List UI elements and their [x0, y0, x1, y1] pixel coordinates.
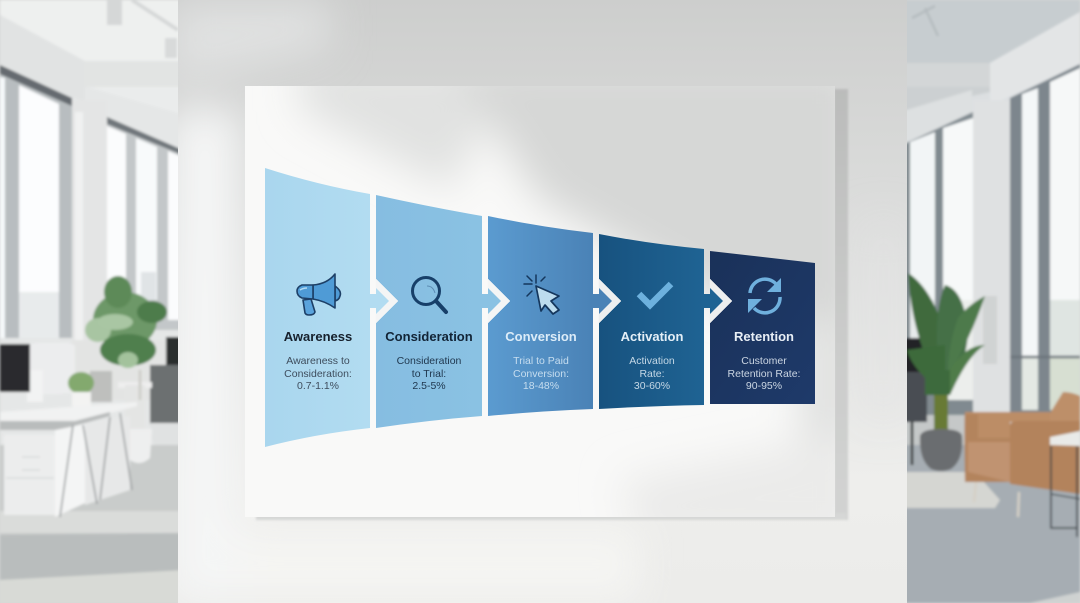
- wall sunlight: [178, 0, 611, 590]
- metric: Activation Rate: Activation: [629, 355, 675, 367]
- icon: magnifier: [412, 278, 446, 312]
- desk chair: [88, 371, 112, 402]
- desk: [0, 402, 137, 422]
- metric: Consideration to Trial: to Trial:: [412, 368, 446, 380]
- board lighting: [296, 86, 835, 517]
- white monitor back: [28, 342, 75, 394]
- title: Activation: Activation: [621, 329, 683, 344]
- metric: Customer Retention Rate: Retention Rate:: [728, 368, 800, 380]
- metric: Trial to Paid Conversion: Conversion:: [513, 368, 569, 380]
- icon: check mark: [639, 284, 671, 305]
- metric: Awareness to Consideration: Consideration:: [284, 368, 352, 380]
- stage: Retention: [710, 251, 815, 404]
- left office background: [0, 0, 185, 603]
- near window: [1010, 64, 1080, 420]
- tall plant: [85, 276, 167, 400]
- metric: Consideration to Trial: Consideration: [397, 355, 462, 367]
- metric: Trial to Paid Conversion: 18-48%: [523, 380, 559, 392]
- icon: megaphone: [297, 274, 340, 315]
- window two: [107, 119, 185, 330]
- armchair: [1047, 392, 1080, 440]
- floor: [0, 445, 185, 603]
- metric: Activation Rate: 30-60%: [634, 380, 670, 392]
- icon: refresh arrows: [748, 278, 781, 313]
- stage: Activation: [599, 234, 704, 409]
- wall behind furniture: [72, 340, 182, 400]
- dark monitor and chair far back: [166, 337, 182, 367]
- title: Retention: Retention: [734, 329, 794, 344]
- title: Conversion: Conversion: [505, 329, 577, 344]
- funnel diagram: [265, 168, 815, 447]
- side table: [1050, 431, 1080, 446]
- title: Consideration: Consideration: [385, 329, 473, 344]
- planter: [920, 429, 962, 471]
- stage: Conversion: [488, 216, 593, 416]
- icon: clicking cursor: [524, 275, 559, 314]
- metric: Awareness to Consideration: 0.7-1.1%: [297, 380, 339, 392]
- stage: Consideration: [376, 195, 482, 428]
- title: Awareness: Awareness: [284, 329, 352, 344]
- board shadow: [256, 89, 848, 520]
- arrow: Conversion to Activation: [592, 279, 621, 323]
- ceiling: [0, 0, 185, 61]
- metric: Activation Rate: Rate:: [639, 368, 665, 380]
- arrow: Consideration to Conversion: [481, 279, 510, 323]
- metric: Customer Retention Rate: 90-95%: [746, 380, 782, 392]
- far side table: [118, 382, 152, 388]
- metric: Trial to Paid Conversion: Trial to Paid: [513, 355, 569, 367]
- far window: [900, 112, 973, 420]
- dark chair: [900, 338, 925, 374]
- central white wall: [170, 0, 907, 603]
- pillar: [973, 100, 1011, 415]
- floor: [900, 445, 1080, 603]
- stage: Awareness: [265, 168, 370, 447]
- metric: Awareness to Consideration: Awareness to: [286, 355, 350, 367]
- black monitor: [0, 344, 30, 392]
- arrow: Awareness to Consideration: [369, 279, 398, 323]
- window one: [0, 67, 72, 338]
- white display board: [245, 86, 835, 517]
- metric: Consideration to Trial: 2.5-5%: [412, 380, 446, 392]
- potted plant: [68, 372, 94, 394]
- arrow: Activation to Retention: [703, 279, 732, 323]
- ceiling: [900, 0, 1080, 63]
- right office background: [900, 0, 1080, 603]
- metric: Customer Retention Rate: Customer: [741, 355, 787, 367]
- palm plant: [934, 380, 948, 430]
